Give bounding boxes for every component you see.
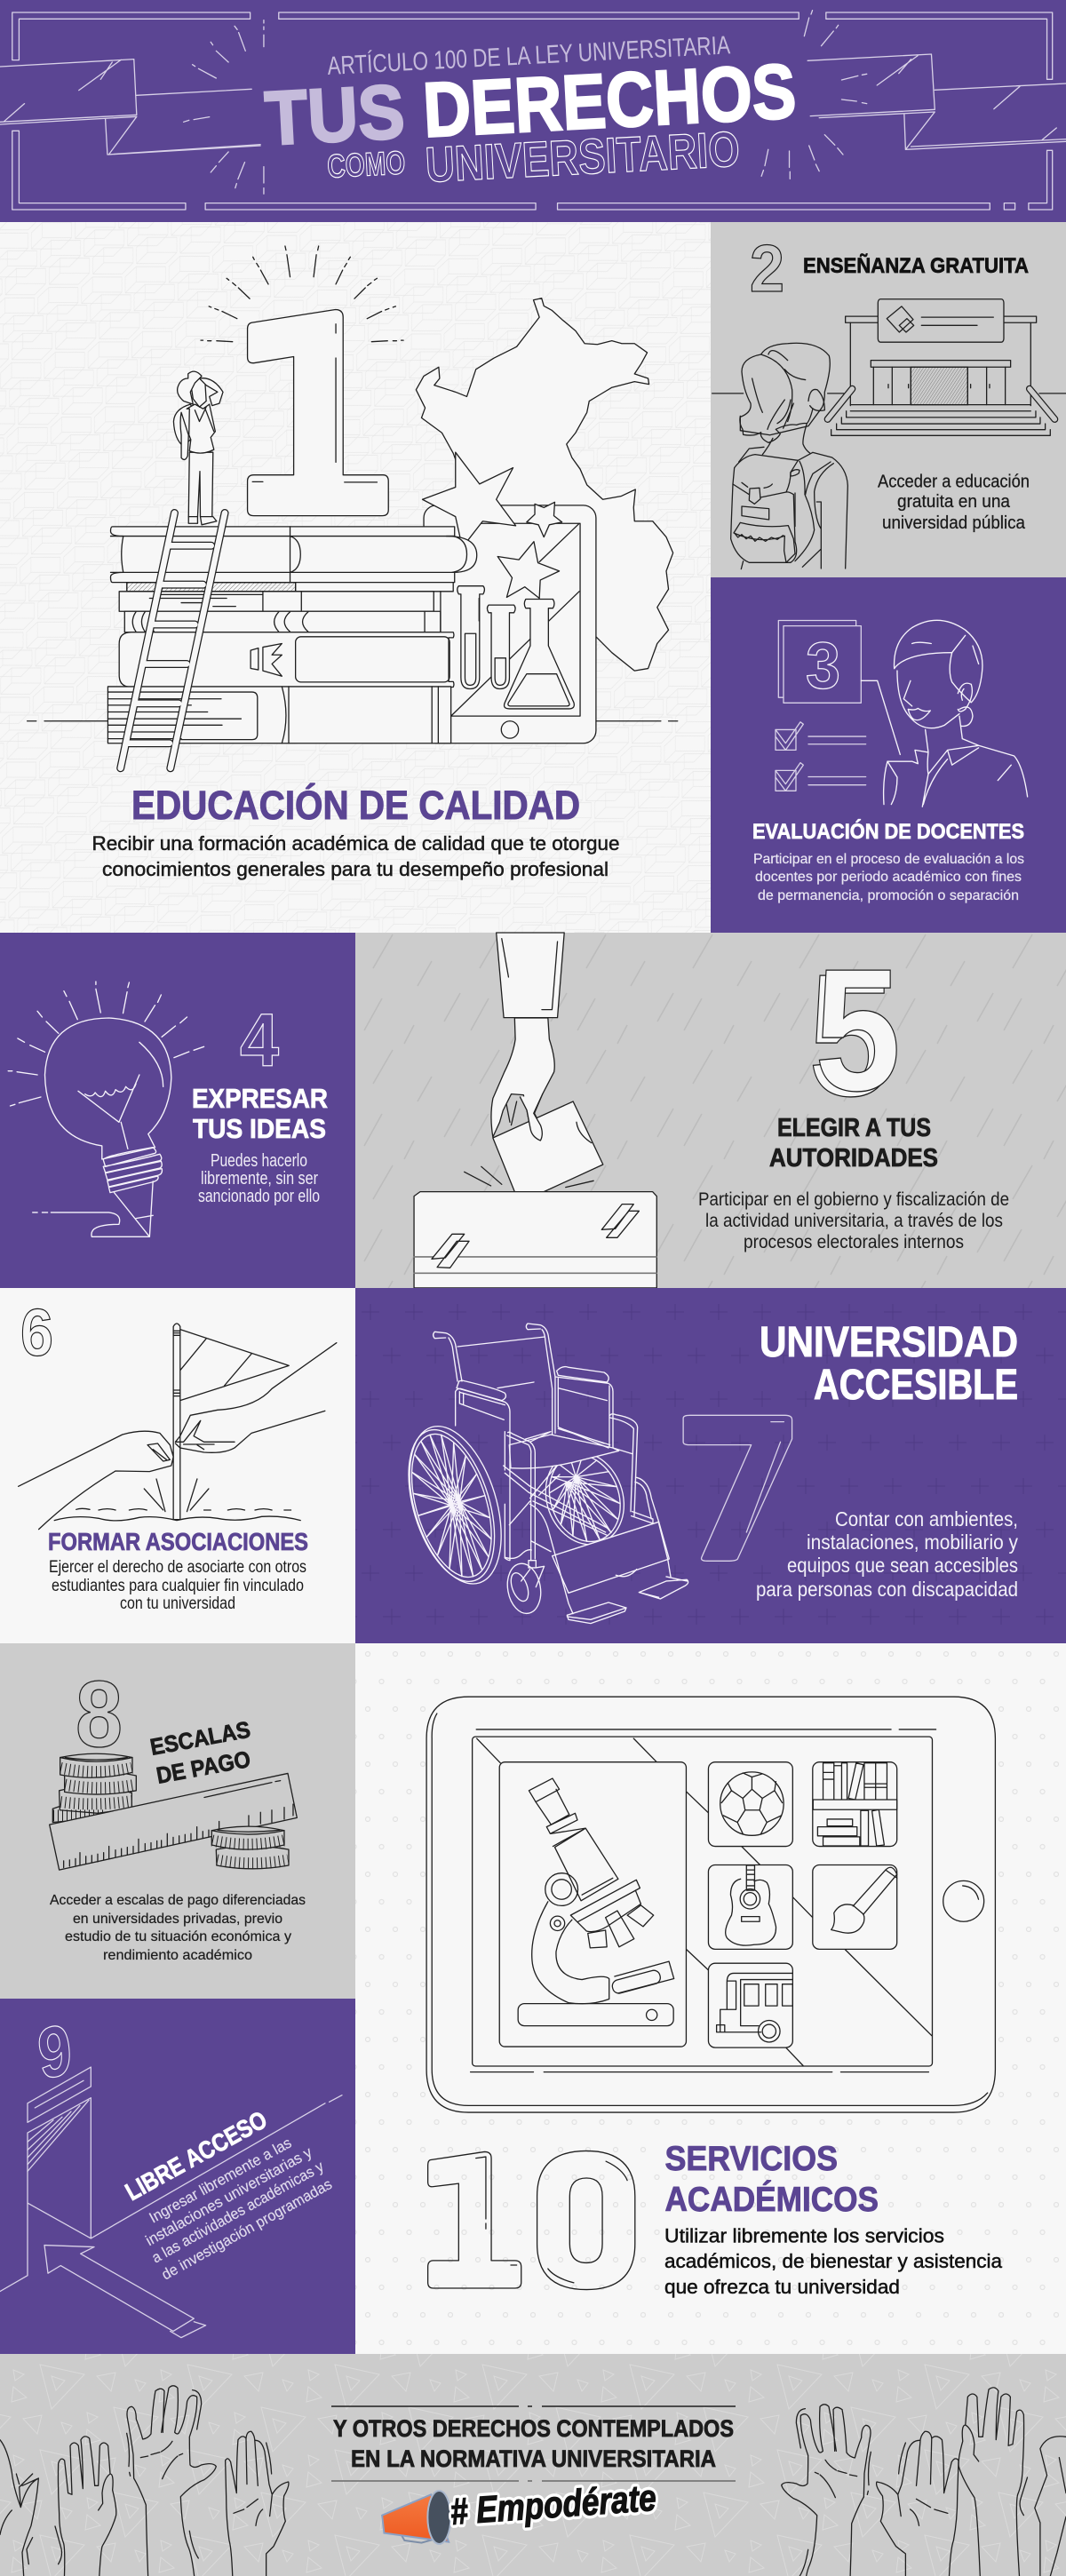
- illustration: student with backpack: [731, 343, 847, 569]
- text: descripción 4: [198, 1151, 320, 1206]
- title: tus: TUS: [263, 69, 407, 162]
- heading: enseñanza gratuita: ENSEÑANZA GRATUITA: [803, 253, 1029, 278]
- card: bookshelf: [813, 1762, 897, 1847]
- heading: libre acceso: LIBRE ACCESO: [121, 2105, 272, 2206]
- text: descripción 3: de permanencia, promoción o separación: [758, 888, 1019, 903]
- divider bottom: [331, 2480, 736, 2482]
- number eight: 8: [76, 1662, 123, 1767]
- number two: 2: [750, 231, 784, 306]
- text: descripción 3: Participar en el proceso de evaluación a los: [753, 852, 1024, 867]
- text: descripción 2: universidad pública: [882, 513, 1026, 533]
- ladder: [121, 513, 225, 768]
- rear wheel: [393, 1415, 518, 1594]
- card: guitar: [708, 1864, 792, 1949]
- heading: servicios académicos: SERVICIOS: [664, 2140, 838, 2178]
- text: descripción 9: a las actividades académicas y: [149, 2158, 327, 2266]
- stars: [423, 452, 516, 547]
- icon: megaphone: [382, 2491, 450, 2544]
- number six: 6: [20, 1295, 53, 1370]
- heading: expresar tus ideas: TUS IDEAS: [193, 1113, 326, 1144]
- panel 6: formar asociaciones: [0, 1288, 355, 1643]
- card: soccer ball: [708, 1762, 792, 1847]
- text: descripción 1: conocimientos generales para tu desempeño profesional: [102, 858, 609, 880]
- text: descripción 8: rendimiento académico: [103, 1948, 252, 1963]
- text: descripción 7: instalaciones, mobiliario y: [807, 1530, 1018, 1554]
- burst lines: [201, 246, 403, 342]
- panel 3: evaluación de docentes: [711, 577, 1066, 933]
- text: descripción 9: de investigación programadas: [159, 2175, 335, 2283]
- illustration: coins on ruler: [50, 1753, 297, 1870]
- text: descripción 8: estudio de tu situación económica y: [65, 1929, 291, 1944]
- text: descripción 4: libremente, sin ser: [201, 1169, 318, 1189]
- heading: elegir a tus autoridades: [769, 1114, 938, 1173]
- text: descripción 6: con tu universidad: [120, 1594, 235, 1613]
- card: paintbrush: [813, 1864, 897, 1949]
- heading: escalas de pago: [148, 1716, 252, 1789]
- text: descripción 10: académicos, de bienestar y asistencia: [664, 2250, 1003, 2272]
- text: descripción 5: Participar en el gobierno y fiscalización de: [698, 1189, 1009, 1210]
- text: descripción 7: Contar con ambientes,: [835, 1507, 1018, 1530]
- panel 1: educación de calidad: [0, 222, 711, 933]
- cross brace and frame: [504, 1466, 607, 1558]
- illustration: university building: [712, 299, 1066, 435]
- back and backpack: [731, 400, 847, 569]
- text: descripción 10: que ofrezca tu universidad: [664, 2276, 900, 2298]
- book two hatch: [127, 583, 296, 592]
- illustration: raised hands left: [0, 2386, 289, 2576]
- heading: universidad accesible: [760, 1319, 1018, 1409]
- title: universitario: UNIVERSITARIO: [424, 121, 741, 193]
- illustration: hands planting a flag: [19, 1324, 337, 1530]
- armrests: [456, 1380, 510, 1432]
- number ten: [428, 2151, 635, 2290]
- text: descripción 2: [878, 473, 1030, 533]
- handles and backrest: [434, 1324, 555, 1435]
- number five: 5: [815, 933, 901, 1127]
- text: descripción 9: Ingresar libremente a las: [147, 2135, 294, 2226]
- heading: otros derechos: [333, 2415, 734, 2472]
- card: microscope: [499, 1762, 686, 2047]
- illustration: door and arrow: [0, 2067, 342, 2338]
- panel 9: libre acceso: [0, 1999, 355, 2354]
- seat: [509, 1435, 619, 1468]
- text: descripción 6: estudiantes para cualquier fin vinculado: [52, 1577, 304, 1595]
- text: descripción 7: equipos que sean accesibles: [787, 1554, 1018, 1577]
- heading: expresar tus ideas: EXPRESAR: [192, 1083, 328, 1114]
- student figure: [173, 371, 223, 525]
- text: descripción 4: sancionado por ello: [198, 1187, 320, 1206]
- ground line: [28, 720, 678, 722]
- illustration: hand voting at ballot box: [414, 933, 656, 1288]
- text: descripción 10: Utilizar libremente los servicios: [664, 2224, 944, 2247]
- heading: servicios académicos: [664, 2140, 879, 2219]
- flask: [505, 599, 574, 709]
- text: descripción 8: [50, 1893, 306, 1963]
- book four: [124, 611, 441, 632]
- heading: otros derechos: Y OTROS DERECHOS CONTEMPLADOS: [333, 2415, 734, 2442]
- text: descripción 3: docentes por periodo académico con fines: [755, 870, 1022, 885]
- heading: educación de calidad: EDUCACIÓN DE CALIDAD: [131, 783, 580, 828]
- hair upper: [740, 343, 830, 435]
- heading: expresar tus ideas: [192, 1083, 328, 1144]
- text: descripción 10: [664, 2224, 1003, 2298]
- heading: universidad accesible: UNIVERSIDAD: [760, 1319, 1018, 1366]
- number three: 3: [806, 629, 840, 702]
- test tubes: [457, 586, 484, 689]
- panel: header: [0, 0, 1066, 222]
- panel: footer: [0, 2354, 1066, 2576]
- header burst lines: [184, 11, 867, 194]
- card: bus: [708, 1963, 792, 2047]
- heading: escalas de pago: ESCALAS: [148, 1716, 252, 1761]
- heading: universidad accesible: ACCESIBLE: [814, 1362, 1018, 1409]
- text: descripción 7: para personas con discapacidad: [756, 1578, 1018, 1601]
- text: descripción 4: Puedes hacerlo: [211, 1151, 307, 1171]
- title: derechos: DERECHOS: [421, 48, 798, 154]
- hashtag: empodérate: # Empodérate: [449, 2477, 657, 2532]
- text: descripción 9: instalaciones universitarias y: [143, 2143, 315, 2249]
- illustration: tablet with services: [426, 1697, 995, 2290]
- heading: otros derechos: EN LA NORMATIVA UNIVERSITARIA: [351, 2445, 716, 2472]
- footrests: [567, 1577, 688, 1624]
- panel 5: elegir a tus autoridades: [355, 933, 1066, 1288]
- heading: evaluación de docentes: EVALUACIÓN DE DOCENTES: [752, 819, 1024, 844]
- illustration: books, number one, Peru map: [28, 246, 678, 768]
- Peru map: [416, 298, 673, 671]
- number nine: 9: [34, 2008, 76, 2095]
- header subtitle: ARTÍCULO 100 DE LA LEY UNIVERSITARIA: [327, 30, 731, 81]
- text: descripción 1: [92, 832, 620, 880]
- text: descripción 5: procesos electorales internos: [744, 1232, 964, 1252]
- text: descripción 3: [753, 852, 1024, 903]
- text: descripción 2: Acceder a educación: [878, 473, 1030, 492]
- panel 7: universidad accesible: [355, 1288, 1066, 1643]
- title: como: COMO: [326, 144, 406, 185]
- header frame: [12, 12, 1053, 210]
- heading: elegir a tus autoridades: ELEGIR A TUS: [777, 1114, 931, 1142]
- book six: [107, 687, 451, 743]
- tablet body: [426, 1697, 995, 2112]
- illustration: raised hands right: [782, 2388, 1066, 2576]
- book one: [110, 527, 477, 583]
- ribbon banner: [0, 54, 1066, 155]
- panel 2: enseñanza gratuita: [711, 222, 1066, 577]
- far wheel: [533, 1441, 637, 1555]
- text: descripción 8: Acceder a escalas de pago diferenciadas: [50, 1893, 306, 1908]
- number four: 4: [240, 998, 279, 1082]
- heading: servicios académicos: ACADÉMICOS: [664, 2180, 879, 2219]
- caster: [504, 1561, 545, 1616]
- text: descripción 1: Recibir una formación académica de calidad que te otorgue: [92, 832, 620, 855]
- illustration: teacher and checklist: [776, 620, 1028, 807]
- text: descripción 5: [698, 1189, 1009, 1252]
- book three: [119, 592, 434, 611]
- number one: [248, 309, 388, 516]
- text: descripción 6: [49, 1558, 306, 1613]
- tablet: [424, 505, 596, 743]
- text: descripción 7: [756, 1507, 1018, 1601]
- text: descripción 2: gratuita en una: [897, 492, 1011, 512]
- heading: formar asociaciones: FORMAR ASOCIACIONES: [48, 1528, 308, 1555]
- number five: 5: [808, 938, 895, 1133]
- illustration: wheelchair: [393, 1324, 688, 1624]
- panel 10: servicios académicos: [355, 1643, 1066, 2354]
- illustration: light bulb: [8, 982, 204, 1236]
- text: descripción 8: en universidades privadas, previo: [73, 1912, 282, 1927]
- panel 8: escalas de pago: [0, 1643, 355, 1999]
- text: descripción 5: la actividad universitaria, a través de los: [705, 1211, 1003, 1231]
- divider top: [331, 2405, 736, 2407]
- heading: escalas de pago: DE PAGO: [155, 1745, 252, 1789]
- text: descripción 6: Ejercer el derecho de asociarte con otros: [49, 1558, 306, 1577]
- panel 4: expresar tus ideas: [0, 933, 355, 1288]
- hashtag: empodérate: # Empodérate: [449, 2477, 657, 2532]
- heading: elegir a tus autoridades: AUTORIDADES: [769, 1144, 938, 1173]
- number seven: [683, 1415, 792, 1561]
- book five: [119, 632, 454, 687]
